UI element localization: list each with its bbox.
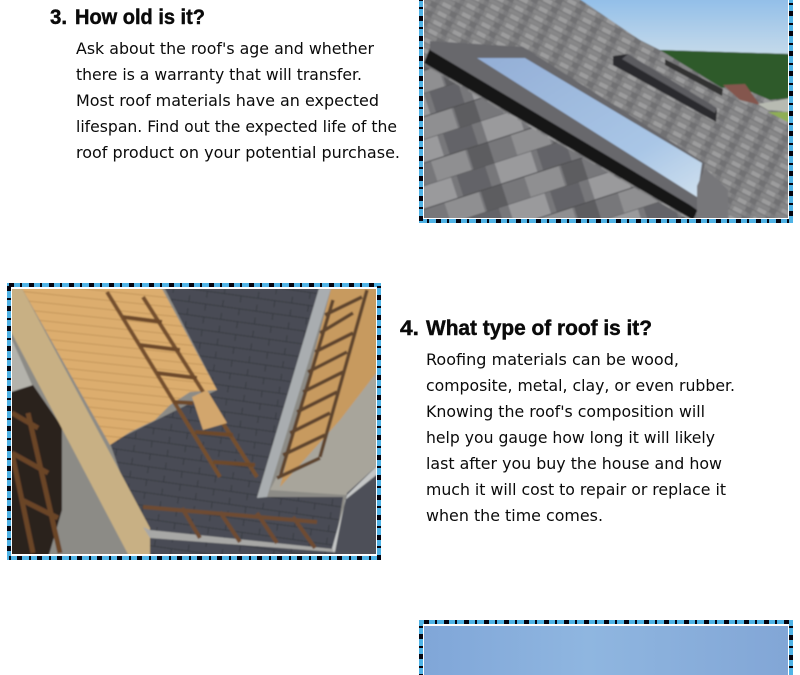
- left ladder: [12, 413, 60, 553]
- section 3 body text: Ask about the roof's age and whether: [76, 39, 374, 58]
- main ladder: [107, 292, 257, 477]
- section 4 body text: last after you buy the house and how: [426, 454, 722, 473]
- section 4 body text: Roofing materials can be wood,: [426, 350, 679, 369]
- section 3 body text: there is a warranty that will transfer.: [76, 65, 362, 84]
- section 4 body text: help you gauge how long it will likely: [426, 428, 715, 447]
- section 3 heading: 3.: [50, 6, 67, 29]
- section 4 body text: composite, metal, clay, or even rubber.: [426, 376, 735, 395]
- photo frame: [9, 285, 379, 558]
- right ladder: [277, 290, 367, 478]
- photo: slate roof under construction with ladders: [8, 285, 380, 558]
- section 3 body text: [76, 39, 400, 162]
- section 4 body text: when the time comes.: [426, 506, 603, 525]
- section 4 body text: much it will cost to repair or replace it: [426, 480, 726, 499]
- section 3 heading: How old is it?: [75, 6, 205, 29]
- section 4 heading: 4.: [400, 317, 419, 340]
- photo frame: [421, 0, 791, 221]
- section 4 body text: Knowing the roof's composition will: [426, 402, 705, 421]
- section 3 body text: Most roof materials have an expected: [76, 91, 379, 110]
- wooden box on ladder: [192, 390, 227, 430]
- photo: blue sky, next section: [421, 622, 791, 675]
- lower ladder: [143, 507, 317, 548]
- photo frame: [421, 622, 791, 675]
- section 3 body text: lifespan. Find out the expected life of the: [76, 117, 397, 136]
- photo: shingle roof with skylights: [420, 0, 792, 222]
- section 4 body text: [426, 350, 735, 525]
- section 3 body text: roof product on your potential purchase.: [76, 143, 400, 162]
- section 4 heading: What type of roof is it?: [426, 317, 652, 340]
